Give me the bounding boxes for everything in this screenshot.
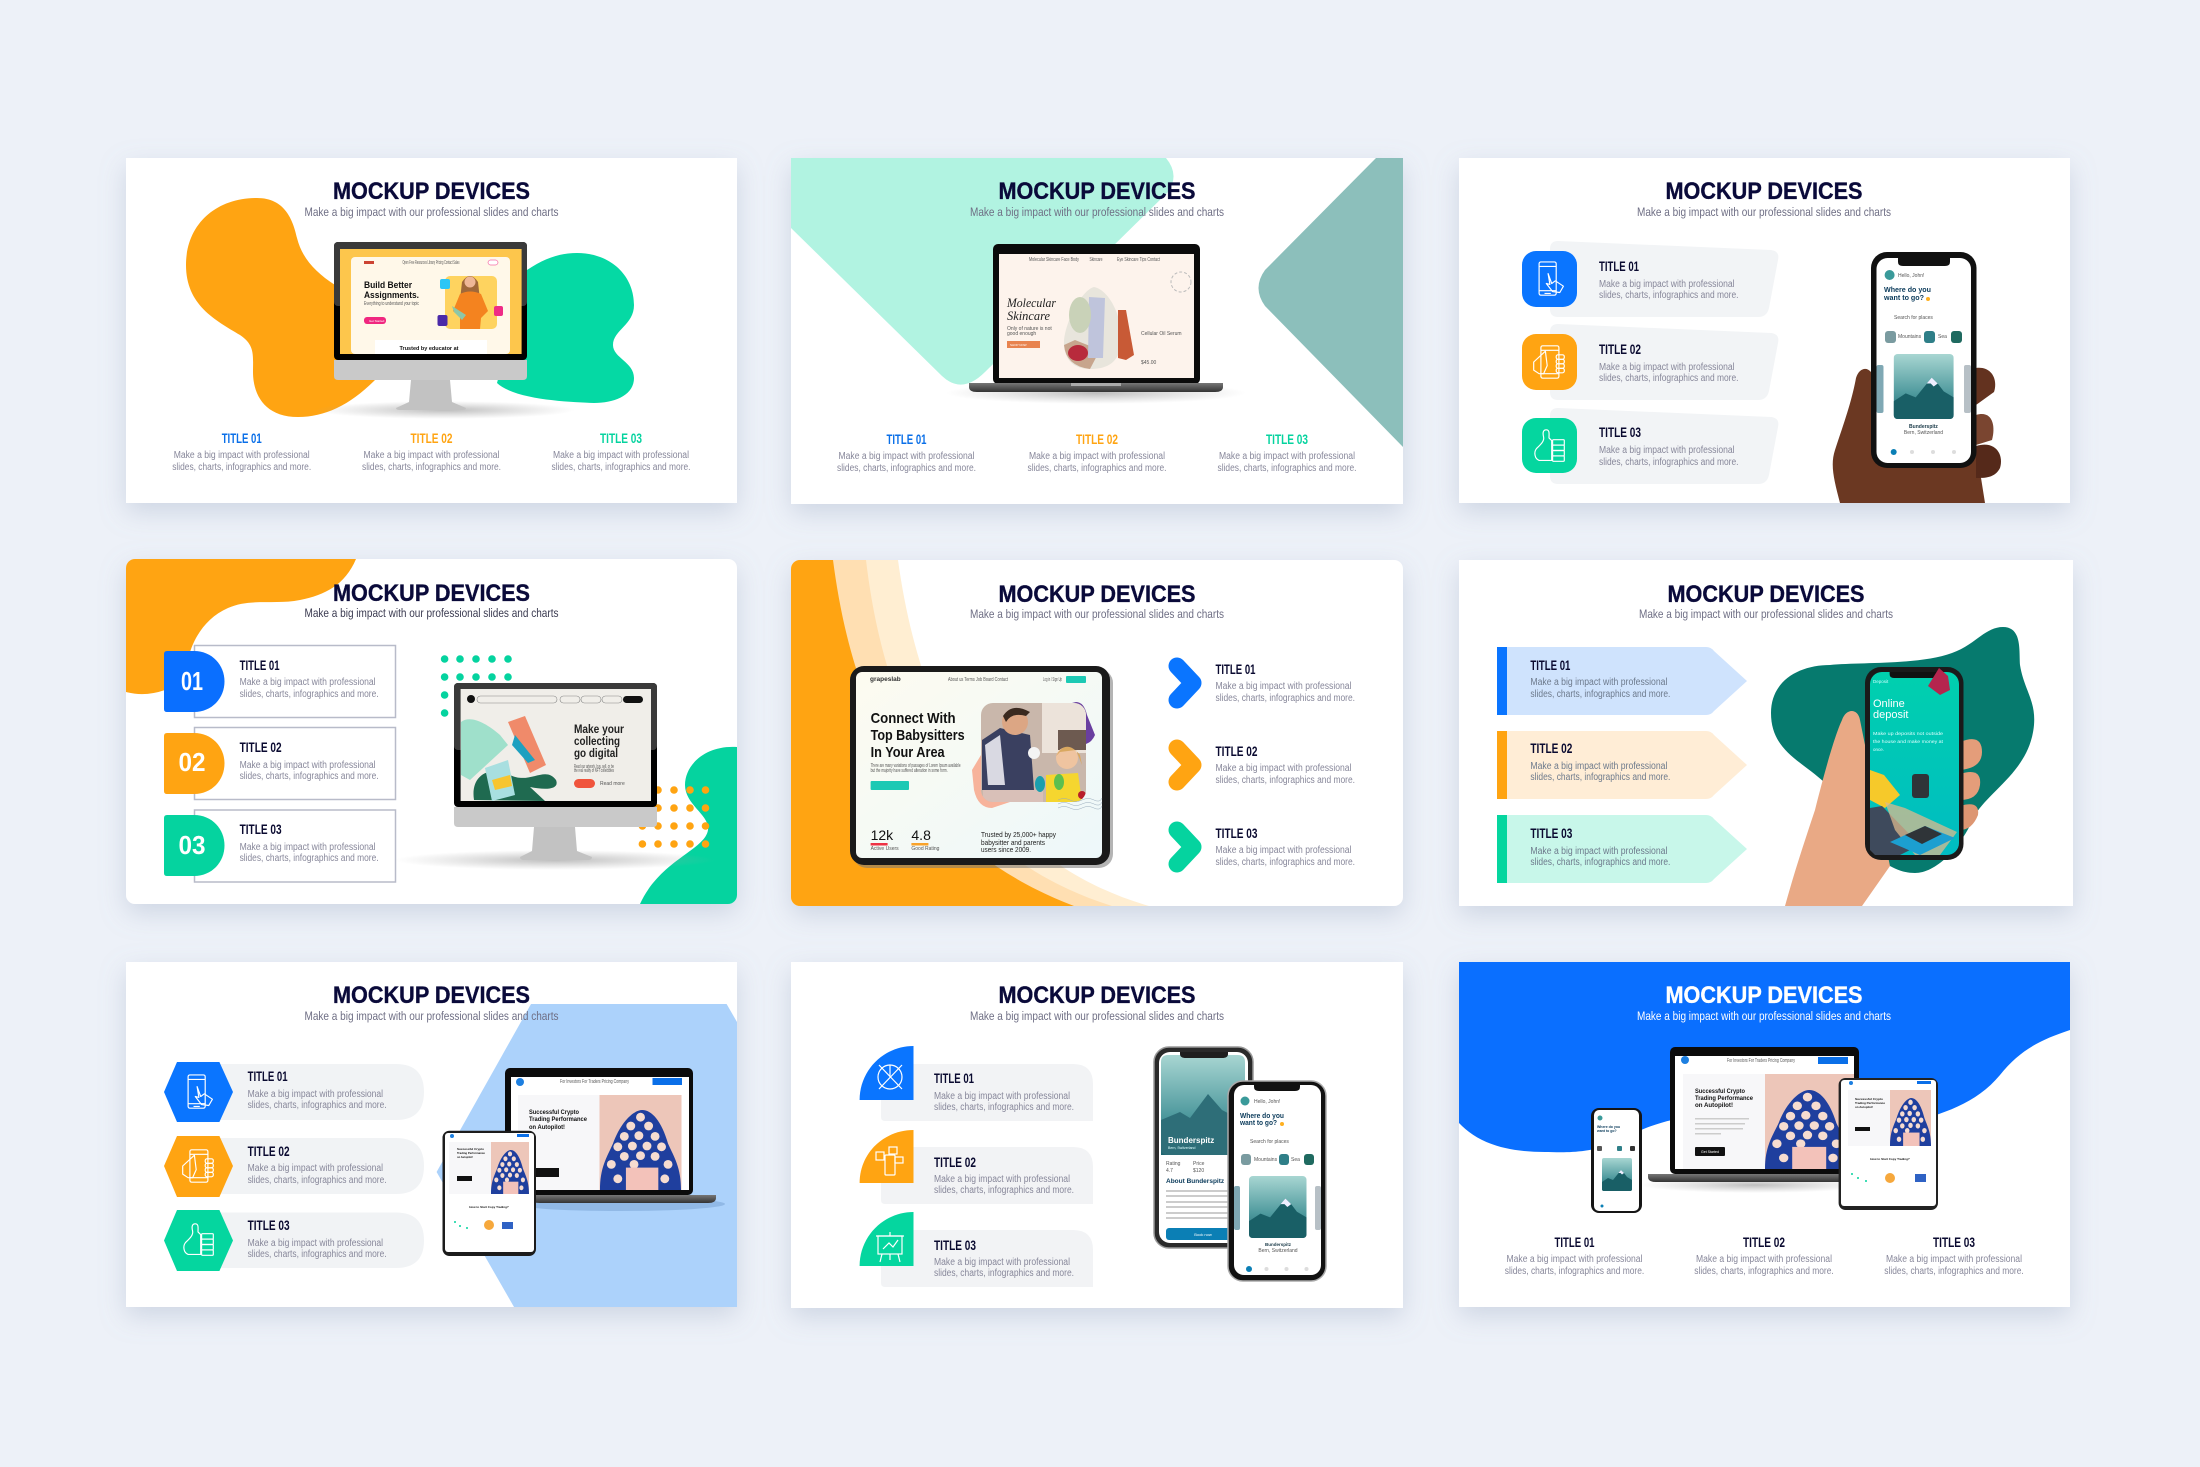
front phone mockup [1228, 1081, 1326, 1281]
mockup screen heading: Connect With [871, 710, 956, 727]
tablet mockup: Good Rating [911, 846, 940, 852]
desktop monitor mockup: Everything to understand your topic [364, 301, 419, 307]
laptop mockup: Trading Performance [529, 1116, 587, 1123]
laptop mockup: Trading Performance [1695, 1095, 1753, 1102]
hexagon item 03 [164, 1210, 424, 1271]
hexagon item 03: Make a big impact with professional [248, 1238, 383, 1249]
title 01 column: Make a big impact with professional [174, 450, 310, 461]
arrow item 02 [1177, 744, 1355, 786]
arrow banner 01: slides, charts, infographics and more. [1530, 689, 1670, 700]
mockup screen heading: Make your [574, 724, 624, 736]
tablet mockup [850, 666, 1113, 868]
laptop mockup: on Autopilot! [529, 1124, 565, 1131]
mockup screen heading: Successful Crypto [1695, 1088, 1745, 1095]
front phone mockup: Bern, Switzerland [1258, 1248, 1298, 1254]
list item 02: TITLE 02 [1599, 342, 1641, 357]
desktop monitor mockup: go digital [574, 748, 618, 760]
title 03 column: slides, charts, infographics and more. [1884, 1266, 2024, 1277]
title 03 column [1884, 1235, 2024, 1277]
front phone mockup: Search for places [1250, 1139, 1289, 1145]
front phone mockup: want to go? [1239, 1118, 1277, 1127]
title 02 column: Make a big impact with professional [1696, 1254, 1832, 1265]
subtitle: Make a big impact with our professional slides and charts [1637, 205, 1891, 219]
panel: slide 2 laptop with mint shapes [791, 158, 1403, 504]
phone mockup [1865, 667, 1964, 860]
phone mockup: Hello, John! [1898, 273, 1924, 279]
title: MOCKUP DEVICES [1666, 178, 1862, 205]
arrow banner 01: TITLE 01 [1530, 658, 1571, 673]
tablet mockup: grapeslab [870, 676, 901, 683]
arrow banner 03: TITLE 03 [1530, 826, 1573, 841]
panel: slide 1 monitor with blobs [126, 158, 737, 503]
phone mockup: Online [1873, 698, 1905, 710]
title 02 column: TITLE 02 [1076, 432, 1118, 447]
title: MOCKUP DEVICES [998, 581, 1196, 608]
teal blob [1771, 627, 2034, 873]
phone mockup [1591, 1108, 1642, 1213]
laptop mockup: Skincare [1090, 257, 1103, 263]
numbered item 02: Make a big impact with professional [240, 760, 376, 771]
list item 02: slides, charts, infographics and more. [1599, 373, 1738, 384]
arrow banner 02 [1497, 731, 1747, 799]
title 02 column: slides, charts, infographics and more. [362, 462, 501, 473]
arrow item 01: TITLE 01 [1216, 662, 1256, 677]
light blue polygon [437, 1004, 737, 1307]
mockup screen heading: Molecular [1006, 295, 1057, 310]
title 02 column: TITLE 02 [1743, 1235, 1785, 1250]
green corner shape [640, 747, 737, 904]
arrow item 02: Make a big impact with professional [1216, 763, 1352, 774]
tablet mockup: but the majority have suffered alteration in some form. [871, 768, 948, 774]
laptop mockup [505, 1068, 725, 1211]
numbered item 02: TITLE 02 [240, 740, 282, 755]
phone mockup: Bern, Switzerland [1904, 430, 1943, 436]
title 01 column: TITLE 01 [886, 432, 927, 447]
orange dot grid [639, 786, 709, 848]
hexagon item 02: Make a big impact with professional [248, 1163, 383, 1174]
hexagon item 03: slides, charts, infographics and more. [248, 1249, 387, 1260]
tablet mockup: In Your Area [871, 744, 945, 761]
tablet mockup: About us Terms Job Board Contact [948, 677, 1008, 683]
quarter item 02: slides, charts, infographics and more. [934, 1185, 1074, 1196]
arrow banner 02: TITLE 02 [1530, 741, 1572, 756]
hexagon item 03: TITLE 03 [248, 1218, 290, 1233]
arrow banner 02: Make a big impact with professional [1530, 761, 1667, 772]
title 03 column: slides, charts, infographics and more. [1218, 463, 1356, 474]
desktop monitor mockup [315, 242, 575, 419]
numbered item 01: slides, charts, infographics and more. [240, 689, 379, 700]
back phone mockup: 4.7 [1166, 1168, 1173, 1174]
tablet mockup: on Autopilot! [1855, 1105, 1873, 1109]
title 03 column: Make a big impact with professional [1219, 451, 1355, 462]
back phone mockup [1154, 1047, 1253, 1248]
arrow item 01: Make a big impact with professional [1216, 681, 1352, 692]
subtitle: Make a big impact with our professional slides and charts [304, 606, 558, 620]
arrow banner 02: slides, charts, infographics and more. [1530, 772, 1670, 783]
list item 01: slides, charts, infographics and more. [1599, 290, 1738, 301]
green blob [497, 253, 634, 403]
title: MOCKUP DEVICES [998, 982, 1196, 1009]
laptop mockup [1640, 1047, 1870, 1193]
tablet mockup: Log in / Sign Up [1043, 677, 1062, 683]
quarter item 03: Make a big impact with professional [934, 1257, 1070, 1268]
phone mockup: want to go? [1883, 293, 1924, 302]
laptop mockup: For Investors For Traders Pricing Company [560, 1079, 629, 1085]
panel: slide 9 blue wave with three devices [1459, 962, 2070, 1307]
tablet mockup: users since 2009. [981, 845, 1031, 854]
tablet mockup: There are many variations of passages of Lorem Ipsum available [871, 763, 961, 769]
desktop monitor mockup: Trusted by educator at [400, 346, 459, 352]
tablet mockup: Trusted by 25,000+ happy [981, 830, 1056, 839]
panel: slide 5 tablet with orange curves [791, 560, 1403, 906]
desktop monitor mockup: Open Free Resources Library Pricing Contact Sales [402, 260, 460, 266]
hand holding phone [1833, 252, 2001, 503]
arrow banner 03: slides, charts, infographics and more. [1530, 857, 1670, 868]
title 01 column: slides, charts, infographics and more. [172, 462, 311, 473]
hand holding phone [1785, 667, 1982, 906]
title 01 column: slides, charts, infographics and more. [837, 463, 976, 474]
phone mockup: Mountains [1898, 334, 1922, 340]
arrow banner 03: Make a big impact with professional [1530, 846, 1667, 857]
subtitle: Make a big impact with our professional slides and charts [1637, 1009, 1891, 1023]
subtitle: Make a big impact with our professional slides and charts [970, 607, 1224, 621]
title 03 column: slides, charts, infographics and more. [552, 462, 690, 473]
phone mockup: want to go? [1596, 1129, 1617, 1133]
front phone mockup: Hello, John! [1254, 1099, 1280, 1105]
laptop mockup: Molecular Skincare Face Body [1029, 257, 1079, 263]
tablet mockup: Active Users [871, 846, 899, 852]
title 03 column [552, 431, 690, 473]
green dot grid [441, 655, 512, 717]
title 03 column: TITLE 03 [1933, 1235, 1975, 1250]
quarter item 01: TITLE 01 [934, 1071, 974, 1086]
tablet mockup: Successful Crypto [1855, 1097, 1883, 1101]
desktop monitor mockup: Assignments. [364, 290, 419, 300]
arrow banner 03 [1497, 815, 1747, 883]
phone mockup: Bunderspitz [1909, 424, 1938, 430]
mockup screen heading: Build Better [364, 280, 412, 290]
arrow item 03 [1177, 826, 1355, 868]
arrow item 01 [1177, 662, 1355, 704]
arrow item 03: TITLE 03 [1216, 826, 1258, 841]
laptop mockup: Skincare [1007, 308, 1050, 323]
phone mockup: Where do you [1597, 1125, 1620, 1129]
blue wave background [1459, 962, 2070, 1152]
subtitle: Make a big impact with our professional slides and charts [1639, 607, 1893, 621]
list item 01 [1522, 241, 1778, 317]
teal rounded triangle [1258, 158, 1403, 447]
laptop mockup: good enough [1007, 331, 1036, 337]
front phone mockup: Mountains [1254, 1157, 1278, 1163]
hexagon item 01: Make a big impact with professional [248, 1089, 383, 1100]
back phone mockup: Price [1193, 1161, 1205, 1167]
tablet mockup: Trading Performance [1855, 1101, 1885, 1105]
tablet mockup: on Autopilot! [457, 1155, 473, 1159]
numbered item 03: slides, charts, infographics and more. [240, 853, 379, 864]
subtitle: Make a big impact with our professional slides and charts [970, 205, 1224, 219]
back phone mockup: Bunderspitz [1168, 1136, 1214, 1145]
subtitle: Make a big impact with our professional slides and charts [304, 1009, 558, 1023]
tablet mockup [1839, 1078, 1938, 1210]
title 02 column: TITLE 02 [410, 431, 452, 446]
tablet mockup: Trading Performance [457, 1151, 485, 1155]
phone mockup [1871, 252, 1976, 468]
title 03 column: TITLE 03 [1266, 432, 1308, 447]
orange blob [186, 198, 375, 417]
title 01 column: slides, charts, infographics and more. [1505, 1266, 1644, 1277]
subtitle: Make a big impact with our professional slides and charts [970, 1009, 1224, 1023]
phone mockup: Deposit [1873, 679, 1889, 684]
title 01 column [172, 431, 311, 473]
tablet mockup: How to Start Copy Trading? [469, 1205, 509, 1209]
arrow item 02: TITLE 02 [1216, 744, 1258, 759]
numbered item 03: TITLE 03 [240, 822, 282, 837]
back phone mockup: Rating [1166, 1161, 1181, 1167]
list item 02: Make a big impact with professional [1599, 362, 1734, 373]
title: MOCKUP DEVICES [1668, 581, 1864, 608]
front phone mockup: Where do you [1240, 1111, 1284, 1120]
title 01 column: TITLE 01 [1554, 1235, 1595, 1250]
numbered item 01: Make a big impact with professional [240, 677, 376, 688]
hexagon item 02: TITLE 02 [248, 1144, 290, 1159]
phone mockup: Sea [1938, 334, 1947, 340]
front phone mockup: Sea [1291, 1157, 1300, 1163]
phone mockup: once. [1873, 747, 1884, 752]
title: MOCKUP DEVICES [333, 178, 530, 205]
arrow item 03: slides, charts, infographics and more. [1216, 857, 1355, 868]
back phone mockup: Bern, Switzerland [1168, 1146, 1195, 1150]
quarter item 02: Make a big impact with professional [934, 1174, 1070, 1185]
phone mockup: the house and make money at [1873, 739, 1944, 744]
title 01 column: Make a big impact with professional [1506, 1254, 1642, 1265]
laptop mockup: $45.00 [1141, 360, 1157, 366]
title: MOCKUP DEVICES [333, 982, 530, 1009]
title 02 column [1694, 1235, 1834, 1277]
subtitle: Make a big impact with our professional slides and charts [304, 205, 558, 219]
title 03 column: Make a big impact with professional [1886, 1254, 2022, 1265]
list item 03: TITLE 03 [1599, 425, 1641, 440]
hexagon item 01 [164, 1062, 424, 1122]
title 02 column [1028, 432, 1166, 474]
quarter item 03 [860, 1212, 1093, 1287]
numbered item 02: 02 [178, 747, 206, 777]
numbered item 03: Make a big impact with professional [240, 842, 376, 853]
tablet mockup: Successful Crypto [457, 1147, 484, 1151]
phone mockup: deposit [1873, 709, 1908, 721]
desktop monitor mockup: Get Started [369, 319, 385, 323]
arrow banner 01 [1497, 647, 1747, 715]
laptop mockup: Cellular Oil Serum [1141, 331, 1182, 337]
list item 03: slides, charts, infographics and more. [1599, 457, 1738, 468]
laptop mockup: Eye Skincare Tips Contact [1117, 257, 1160, 263]
title 03 column [1218, 432, 1356, 474]
desktop monitor mockup: collecting [574, 736, 620, 748]
numbered item 01 [164, 646, 396, 718]
panel: slide 7 hexagons with laptop and tablet [126, 962, 737, 1307]
title 02 column: Make a big impact with professional [364, 450, 500, 461]
hexagon item 01: slides, charts, infographics and more. [248, 1100, 387, 1111]
quarter item 02: TITLE 02 [934, 1155, 976, 1170]
orange corner shape [126, 559, 356, 694]
list item 03 [1522, 408, 1778, 484]
quarter item 01: slides, charts, infographics and more. [934, 1102, 1074, 1113]
title: MOCKUP DEVICES [333, 580, 530, 607]
desktop monitor mockup: Read our artwork, buy, sell, or be [574, 764, 614, 770]
numbered item 02 [164, 728, 396, 800]
desktop monitor mockup [395, 683, 715, 870]
front phone mockup: Bunderspitz [1265, 1242, 1292, 1247]
mockup screen heading: Successful Crypto [529, 1109, 579, 1116]
title 01 column [837, 432, 976, 474]
quarter item 01: Make a big impact with professional [934, 1091, 1070, 1102]
back phone mockup: About Bunderspitz [1166, 1178, 1225, 1185]
quarter item 03: slides, charts, infographics and more. [934, 1268, 1074, 1279]
back phone mockup: $120 [1193, 1168, 1204, 1174]
numbered item 02: slides, charts, infographics and more. [240, 771, 379, 782]
mint rounded triangle [791, 158, 1174, 385]
tablet mockup: 4.8 [911, 827, 931, 843]
laptop mockup [946, 244, 1246, 404]
orange curved bands [791, 560, 1149, 906]
panel: slide 3 phone in hand [1459, 158, 2070, 503]
tablet mockup [442, 1131, 536, 1256]
tablet mockup: babysitter and parents [981, 838, 1045, 847]
title 01 column: TITLE 01 [222, 431, 262, 446]
title: MOCKUP DEVICES [1666, 982, 1862, 1009]
mockup photo [981, 703, 1086, 802]
hexagon item 01: TITLE 01 [248, 1069, 288, 1084]
back phone mockup: Book now [1194, 1232, 1212, 1237]
laptop mockup: Get Started [1701, 1150, 1719, 1154]
hexagon item 02: slides, charts, infographics and more. [248, 1175, 387, 1186]
phone mockup: Make up deposits not outside [1873, 731, 1944, 736]
quarter item 03: TITLE 03 [934, 1238, 976, 1253]
laptop mockup: Only of nature is not [1007, 326, 1052, 332]
list item 03: Make a big impact with professional [1599, 445, 1734, 456]
title 03 column: Make a big impact with professional [553, 450, 689, 461]
desktop monitor mockup: Read more [600, 781, 625, 787]
title 03 column: TITLE 03 [600, 431, 642, 446]
title 02 column: slides, charts, infographics and more. [1694, 1266, 1834, 1277]
tablet mockup: How to Start Copy Trading? [1870, 1157, 1910, 1161]
arrow item 02: slides, charts, infographics and more. [1216, 775, 1355, 786]
arrow banner 01: Make a big impact with professional [1530, 677, 1667, 688]
hexagon item 02 [164, 1136, 424, 1197]
arrow item 03: Make a big impact with professional [1216, 845, 1352, 856]
numbered item 01: TITLE 01 [240, 658, 280, 673]
phone mockup: Where do you [1884, 285, 1931, 294]
title 02 column: slides, charts, infographics and more. [1028, 463, 1166, 474]
title 02 column: Make a big impact with professional [1029, 451, 1165, 462]
tablet mockup: Top Babysitters [871, 727, 965, 744]
quarter item 02 [860, 1130, 1093, 1204]
panel: slide 6 hand with phone on teal blob [1459, 560, 2073, 906]
title 02 column [362, 431, 501, 473]
quarter item 01 [860, 1046, 1093, 1121]
laptop mockup: For Investors For Traders Pricing Company [1727, 1058, 1795, 1064]
numbered item 03: 03 [178, 830, 206, 860]
list item 02 [1522, 324, 1778, 400]
phone mockup: Search for places [1894, 315, 1933, 321]
laptop mockup: SHOP NOW [1010, 343, 1027, 347]
panel: slide 8 quarter circles with two phones [791, 962, 1403, 1308]
panel: slide 4 numbered boxes with monitor [126, 559, 737, 904]
title 01 column [1505, 1235, 1644, 1277]
numbered item 03 [164, 810, 396, 882]
desktop monitor mockup: the real reality of NFT collectibles [574, 768, 614, 774]
list item 01: TITLE 01 [1599, 259, 1639, 274]
tablet mockup: 12k [871, 827, 894, 843]
numbered item 01: 01 [181, 666, 203, 696]
title: MOCKUP DEVICES [998, 178, 1196, 205]
list item 01: Make a big impact with professional [1599, 279, 1734, 290]
title 01 column: Make a big impact with professional [838, 451, 974, 462]
laptop mockup: on Autopilot! [1695, 1102, 1733, 1109]
arrow item 01: slides, charts, infographics and more. [1216, 693, 1355, 704]
